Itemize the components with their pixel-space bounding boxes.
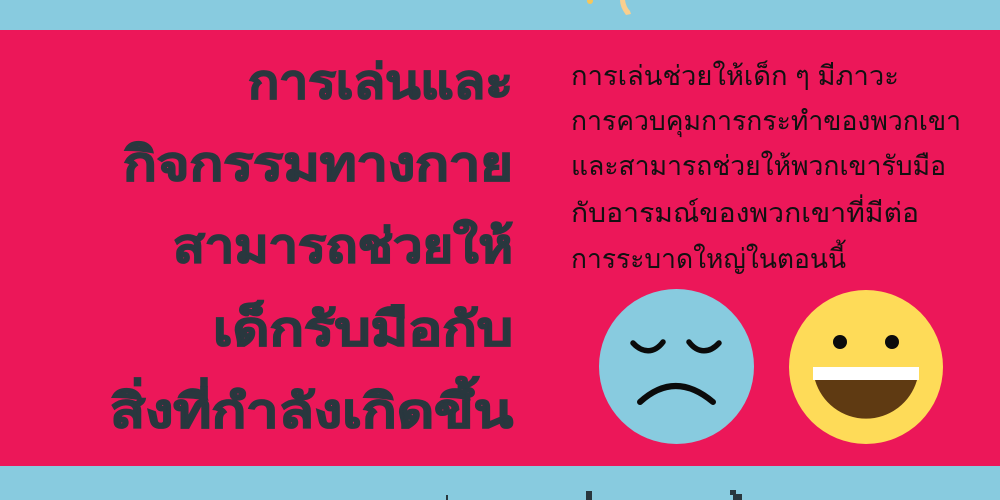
body text: การควบคุมการกระทำของพวกเขา: [571, 106, 961, 138]
bottom band: [0, 466, 1000, 500]
heading: เด็กรับมือกับ: [213, 299, 513, 355]
icon: sad face: [599, 289, 754, 444]
heading: กิจกรรมทางกาย: [123, 137, 513, 190]
heading: [110, 55, 513, 437]
icon: happy face: [789, 290, 943, 444]
body text: การเล่นช่วยให้เด็ก ๆ มีภาวะ: [571, 58, 899, 91]
top band: [0, 0, 1000, 30]
clipped bottom text marks: [446, 490, 742, 500]
body text: และสามารถช่วยให้พวกเขารับมือ: [571, 150, 946, 181]
body text: กับอารมณ์ของพวกเขาที่มีต่อ: [571, 194, 919, 228]
body text: [571, 58, 961, 274]
heading: สิ่งที่กำลังเกิดขึ้น: [110, 376, 513, 437]
heading: สามารถช่วยให้: [173, 218, 513, 272]
clipped illustration: feet at top: [587, 0, 631, 15]
heading: การเล่นและ: [248, 55, 513, 108]
body text: การระบาดใหญ่ในตอนนี้: [571, 239, 846, 274]
